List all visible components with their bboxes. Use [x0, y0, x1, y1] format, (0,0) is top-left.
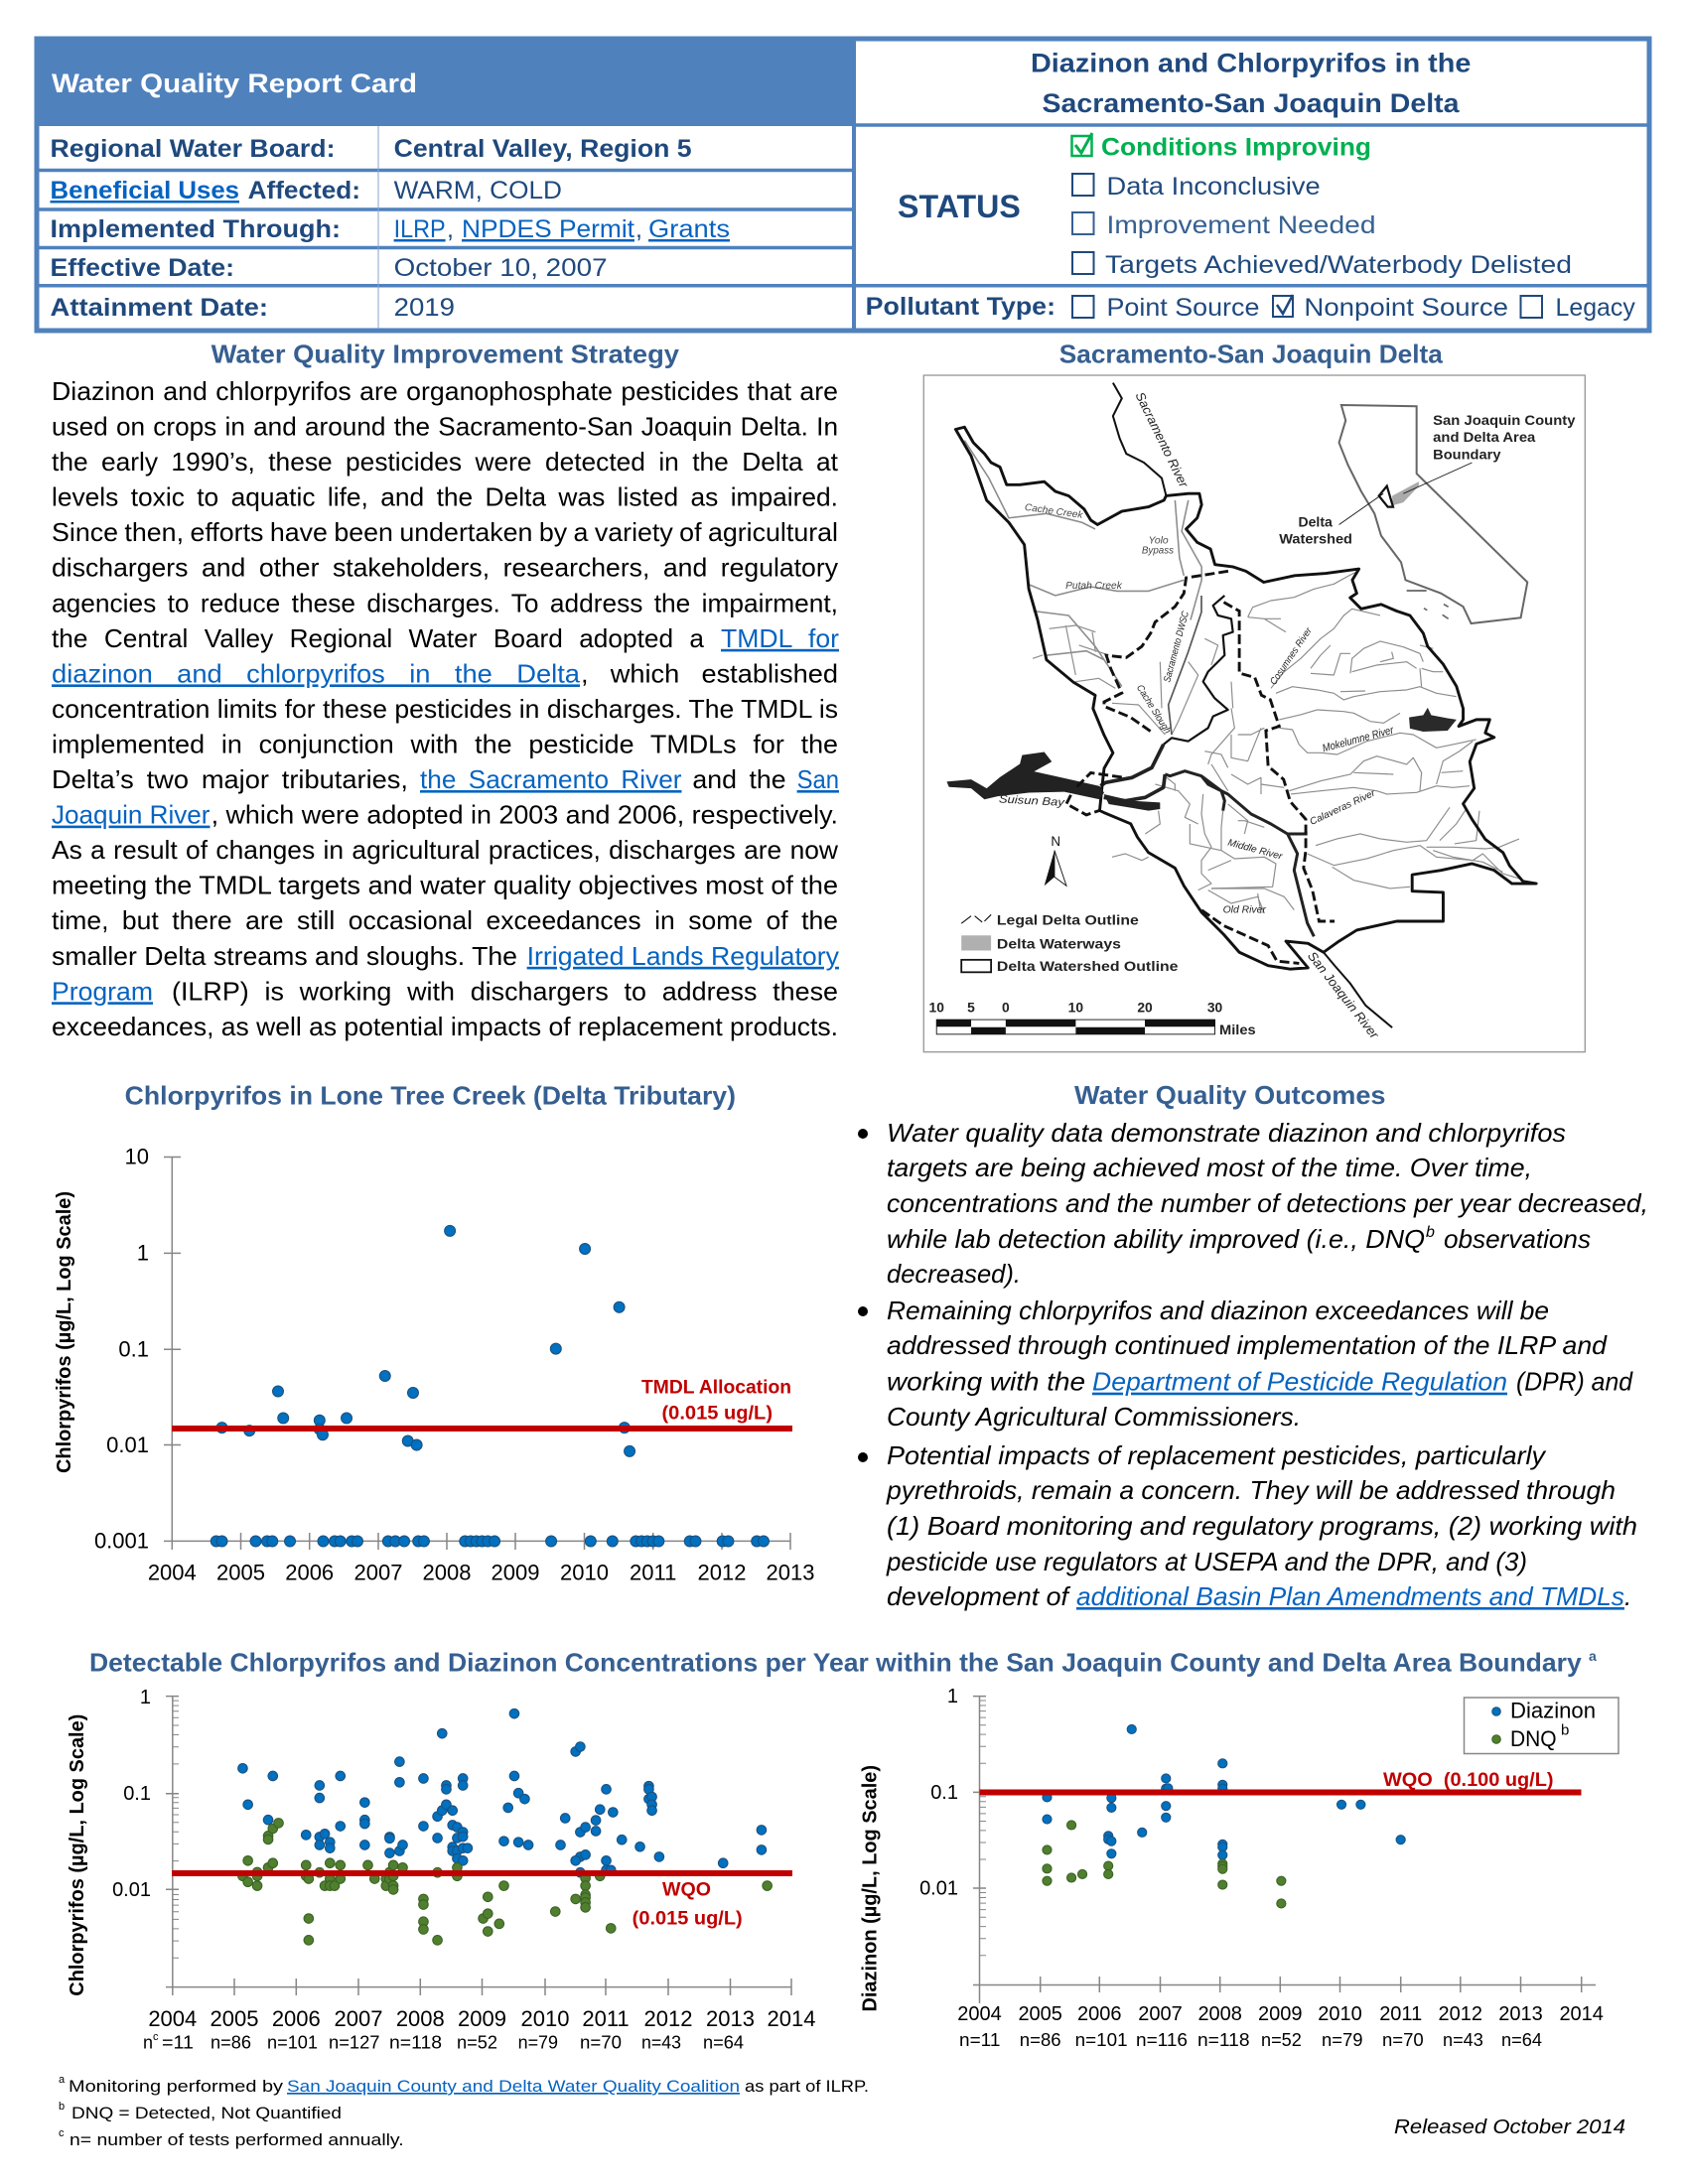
text block: strategy paragraph: concentration limits for these pesticides in discharges. The TMDL is	[52, 694, 838, 724]
map scale bar: Miles	[1219, 1022, 1256, 1037]
y axis labels: 0.1	[118, 1336, 149, 1362]
sample counts: n=11	[959, 2030, 1000, 2050]
map: river labels: Sacramento River	[1133, 389, 1192, 490]
x axis labels: 2013	[1498, 2003, 1543, 2025]
text block: strategy paragraph: Program	[52, 976, 153, 1006]
y axis labels	[94, 1144, 149, 1553]
bullet 3: additional Basin Plan Amendments and TMDLs	[1076, 1581, 1624, 1611]
table: program details: 2019	[394, 294, 455, 322]
text block: strategy paragraph: San	[797, 764, 839, 794]
sample counts: n=86	[1020, 2030, 1061, 2050]
map legend: Delta Watershed Outline	[997, 958, 1179, 974]
legend: Diazinon	[1510, 1699, 1596, 1723]
chart: Chlorpyrifos in Lone Tree Creek	[54, 1144, 814, 1585]
sample counts: n=79	[1322, 2030, 1362, 2050]
text block: outcomes bullets	[858, 1118, 1648, 1611]
map: California inset: Boundary	[1433, 446, 1501, 462]
x axis labels: 2010	[521, 2006, 569, 2031]
footnotes	[59, 2074, 869, 2149]
text block: strategy paragraph: meeting the TMDL targets and water quality objectives most of the	[52, 871, 838, 900]
WQO threshold line	[979, 1789, 1581, 1795]
y axis labels: 1	[140, 1687, 151, 1708]
table: program details: October 10, 2007	[394, 254, 608, 282]
text block: strategy paragraph: Irrigated Lands Regulatory	[527, 941, 839, 971]
bullet 3	[858, 1440, 1637, 1611]
map scale bar: 10	[1068, 1000, 1083, 1016]
map: Suisun Bay	[946, 751, 1104, 799]
status label: STATUS	[898, 189, 1021, 224]
x axis labels: 2006	[285, 1561, 334, 1585]
x axis labels: 2009	[458, 2006, 506, 2031]
map: river labels: Putah Creek	[1065, 581, 1123, 592]
y axis labels: 1	[947, 1686, 958, 1707]
x axis labels	[148, 1561, 814, 1585]
table: program details	[50, 135, 730, 322]
x axis labels: 2004	[957, 2003, 1002, 2025]
map: river labels: Bypass	[1142, 545, 1174, 556]
map: Legal Delta outline	[1066, 571, 1335, 963]
x axis labels: 2005	[216, 1561, 265, 1585]
WQO label: WQO	[662, 1880, 711, 1901]
y axis title: Chlorpyrifos (µg/L, Log Scale)	[54, 1191, 75, 1473]
release date: Released October 2014	[1394, 2116, 1625, 2138]
TMDL threshold line	[172, 1426, 792, 1432]
WQO label	[633, 1880, 743, 1929]
heading: report title	[1031, 48, 1471, 118]
x axis labels: 2008	[396, 2006, 445, 2031]
pollutant type row: Nonpoint Source	[1304, 294, 1508, 322]
y axis labels: 0.1	[930, 1782, 958, 1804]
map legend: Legal Delta Outline	[997, 912, 1139, 928]
map scale bar: 5	[967, 1000, 975, 1016]
sample counts: n=52	[1261, 2030, 1302, 2050]
bullet 1: observations	[1444, 1224, 1591, 1254]
bullet 1: while lab detection ability improved (i.e., DNQ	[887, 1224, 1425, 1254]
map: California inset: Watershed	[1279, 531, 1352, 547]
TMDL label: (0.015 ug/L)	[661, 1404, 773, 1425]
table: program details: Attainment Date:	[50, 294, 268, 322]
bullet 2: (DPR) and	[1516, 1367, 1633, 1397]
sample counts: n=70	[580, 2032, 622, 2052]
x axis labels: 2009	[1258, 2003, 1303, 2025]
icon: north arrow: N	[1051, 834, 1060, 849]
table: program details: Central Valley, Region 5	[394, 135, 692, 163]
y axis title: Chlorpyrifos (µg/L, Log Scale)	[67, 1714, 88, 1996]
sample counts: n=101	[1075, 2030, 1128, 2050]
text block: strategy paragraph	[52, 376, 839, 1041]
sample counts: n	[143, 2032, 153, 2052]
x axis labels	[957, 2003, 1604, 2025]
x axis labels: 2011	[630, 1561, 676, 1585]
panel: Delta map	[923, 375, 1585, 1052]
footnotes: c	[59, 2127, 65, 2139]
bullet 1	[858, 1118, 1648, 1289]
x axis labels	[148, 2006, 815, 2031]
bullet 3: pesticide use regulators at USEPA and the DPR, and (3)	[886, 1547, 1527, 1576]
table: program details: Grants	[648, 215, 730, 243]
sample counts	[959, 2030, 1542, 2050]
y axis labels	[112, 1687, 151, 1901]
text block: strategy paragraph: levels toxic to aquatic life, and the Delta was listed as impaired.	[52, 482, 838, 512]
map: California inset	[1279, 405, 1576, 623]
status checklist	[1072, 133, 1572, 279]
sample counts: c	[153, 2031, 159, 2043]
x axis labels: 2011	[1379, 2003, 1422, 2025]
text block: strategy paragraph: , which established	[581, 658, 838, 688]
map: western gray waterways	[964, 441, 1201, 686]
x axis labels: 2004	[148, 1561, 197, 1585]
x axis labels: 2009	[492, 1561, 539, 1585]
text block: strategy paragraph: Delta’s two major tributaries,	[52, 764, 408, 794]
map scale bar: 0	[1002, 1000, 1010, 1016]
icon: north arrow	[1045, 834, 1066, 886]
WQO label: (0.015 ug/L)	[633, 1908, 743, 1929]
text block: strategy paragraph: implemented in conjunction with the pesticide TMDLs for the	[52, 729, 838, 758]
sample counts: n=101	[267, 2032, 318, 2052]
text block: strategy paragraph: diazinon and chlorpyrifos in the Delta	[52, 658, 581, 688]
sample counts	[143, 2031, 744, 2052]
legend: DNQ	[1510, 1726, 1557, 1751]
heading: concentrations per year: a	[1589, 1648, 1597, 1664]
bullet 2: working with the	[887, 1367, 1085, 1397]
map: river labels	[999, 389, 1396, 1042]
map: river labels: Sacramento DWSC	[1162, 610, 1192, 684]
pollutant type row: Pollutant Type:	[866, 293, 1055, 321]
map: river labels: Middle River	[1226, 837, 1284, 863]
text block: strategy paragraph: dischargers and other stakeholders, researchers, and regulatory	[52, 553, 838, 583]
sample counts: n=70	[1382, 2030, 1424, 2050]
data points	[211, 1225, 769, 1547]
bullet 1: b	[1426, 1224, 1435, 1241]
map: river labels: Cache Slough	[1134, 683, 1173, 736]
bullet 1: Water quality data demonstrate diazinon and chlorpyrifos	[887, 1118, 1566, 1148]
map: main rivers	[1113, 383, 1392, 1027]
text block: strategy paragraph: Since then, efforts have been undertaken by a variety of agricultural	[52, 517, 838, 547]
heading: Lone Tree Creek chart title: Chlorpyrifos in Lone Tree Creek (Delta Tributary)	[125, 1081, 736, 1111]
sample counts: n=86	[211, 2032, 251, 2052]
text block: strategy paragraph: the Central Valley Regional Water Board adopted a	[52, 623, 705, 653]
text block: strategy paragraph: the early 1990’s, these pesticides were detected in the Delta at	[52, 447, 839, 477]
x axis labels: 2007	[1138, 2003, 1183, 2025]
text block: strategy paragraph: , which were adopted in 2003 and 2006, respectively.	[211, 800, 838, 830]
table: program details: Regional Water Board:	[50, 135, 336, 163]
data points: chlorpyrifos	[238, 1708, 772, 1945]
y axis labels: 0.01	[106, 1433, 149, 1457]
table: program details: ,	[447, 215, 454, 243]
bullet 2: Department of Pesticide Regulation	[1092, 1367, 1507, 1397]
panel: report card header table	[35, 37, 1649, 331]
footnotes: DNQ = Detected, Not Quantified	[71, 2104, 342, 2122]
map: river labels: Cache Creek	[1024, 502, 1084, 521]
text block: strategy paragraph: smaller Delta streams and sloughs. The	[52, 941, 517, 971]
sample counts: n=118	[1197, 2030, 1249, 2050]
footnotes: San Joaquin County and Delta Water Quality Coalition	[287, 2077, 740, 2096]
map scale bar	[929, 1000, 1256, 1037]
table: program details: Affected:	[248, 177, 360, 205]
x axis labels: 2012	[644, 2006, 692, 2031]
map scale bar: 10	[929, 1000, 944, 1016]
pollutant type row: Legacy	[1555, 294, 1635, 322]
table: program details: ILRP	[394, 215, 446, 243]
map: river labels: Calaveras River	[1308, 787, 1378, 828]
map: river labels: San Joaquin River	[1305, 948, 1382, 1042]
y axis labels: 1	[137, 1241, 149, 1265]
y axis title: Diazinon (µg/L, Log Scale)	[859, 1765, 881, 2011]
heading: concentrations per year: Detectable Chlorpyrifos and Diazinon Concentrations per Year within the San Joaquin County and Delta Area Boundary	[89, 1647, 1582, 1677]
sample counts: n=64	[1501, 2030, 1542, 2050]
legend: b	[1561, 1721, 1569, 1739]
pollutant type row	[866, 293, 1635, 322]
map legend	[961, 912, 1179, 974]
x axis labels: 2010	[1318, 2003, 1362, 2025]
heading: report title: Sacramento-San Joaquin Delta	[1043, 88, 1461, 118]
map: river labels: Cosumnes River	[1268, 625, 1315, 687]
map: dark channels	[1164, 596, 1233, 745]
sample counts: n=116	[1136, 2030, 1188, 2050]
footnotes: n= number of tests performed annually.	[70, 2130, 404, 2149]
inset coastline and islands	[1407, 591, 1449, 618]
status checklist: Data Inconclusive	[1106, 173, 1321, 201]
map legend: Delta Waterways	[997, 936, 1121, 952]
x axis labels: 2007	[335, 2006, 382, 2031]
TMDL label: TMDL Allocation	[641, 1378, 791, 1399]
map: Delta watershed outline	[955, 427, 1536, 969]
map scale bar: 20	[1137, 1000, 1153, 1016]
text block: strategy paragraph: exceedances, as well as potential impacts of replacement products.	[52, 1012, 838, 1041]
bullet 1: targets are being achieved most of the time. Over time,	[887, 1153, 1532, 1182]
sample counts: n=43	[1443, 2030, 1483, 2050]
map: river labels: Old River	[1223, 905, 1267, 916]
text block: strategy paragraph: and the	[692, 764, 786, 794]
text block: strategy paragraph: the Sacramento River	[420, 764, 682, 794]
map: eastern tributaries	[1248, 571, 1519, 888]
text block: strategy paragraph: Joaquin River	[52, 800, 211, 830]
sample counts: n=43	[641, 2032, 681, 2052]
x axis labels: 2006	[1077, 2003, 1122, 2025]
heading: Water Quality Outcomes: Water Quality Outcomes	[1074, 1080, 1386, 1110]
table: program details: WARM, COLD	[394, 177, 562, 205]
x axis labels: 2013	[767, 1561, 814, 1585]
map: California inset: San Joaquin County	[1433, 412, 1576, 428]
text block: strategy paragraph: (ILRP) is working with dischargers to address these	[172, 976, 838, 1006]
y axis labels	[919, 1686, 958, 1900]
x axis labels: 2008	[1197, 2003, 1242, 2025]
map: river labels: Yolo	[1149, 536, 1169, 547]
table: program details: ,	[635, 215, 642, 243]
y axis labels: 10	[125, 1144, 149, 1169]
text block: strategy paragraph: Diazinon and chlorpyrifos are organophosphate pesticides that are	[52, 376, 838, 406]
map: central delta waterways	[1033, 596, 1314, 936]
footnotes: Monitoring performed by	[69, 2077, 284, 2096]
x axis labels: 2005	[211, 2006, 258, 2031]
sample counts: n=52	[457, 2032, 497, 2052]
status checklist: Targets Achieved/Waterbody Delisted	[1105, 251, 1572, 279]
status checklist: Improvement Needed	[1106, 211, 1376, 239]
map: California inset: and Delta Area	[1433, 429, 1536, 445]
x axis labels: 2012	[1439, 2003, 1482, 2025]
table: program details: Effective Date:	[50, 254, 234, 282]
text block: strategy paragraph: agencies to reduce these discharges. To address the impairment,	[52, 588, 838, 617]
x axis labels: 2012	[698, 1561, 746, 1585]
footnotes: as part of ILRP.	[745, 2077, 869, 2096]
x axis labels: 2004	[148, 2006, 197, 2031]
WQO threshold line	[172, 1870, 792, 1876]
bullet 2: County Agricultural Commissioners.	[887, 1402, 1301, 1432]
y axis labels: 0.1	[123, 1783, 151, 1805]
footnotes: b	[59, 2101, 65, 2113]
status checklist: Conditions Improving	[1101, 134, 1371, 162]
bullet 2: Remaining chlorpyrifos and diazinon exceedances will be	[887, 1296, 1549, 1325]
pollutant type row: Point Source	[1106, 294, 1259, 322]
heading: Water Quality Report Card: Water Quality Report Card	[52, 68, 417, 98]
map: river labels: Suisun Bay	[999, 793, 1066, 809]
map: river labels: Mokelumne River	[1322, 724, 1396, 754]
TMDL label	[641, 1378, 791, 1425]
text block: strategy paragraph: As a result of changes in agricultural practices, discharges are now	[52, 835, 838, 865]
map scale bar: 30	[1207, 1000, 1223, 1016]
bullet 1: concentrations and the number of detections per year decreased,	[887, 1188, 1648, 1218]
table: program details: Implemented Through:	[50, 215, 341, 243]
chart: Diazinon concentrations per year	[859, 1686, 1618, 2050]
y axis labels: 0.001	[94, 1529, 149, 1553]
WQO label: WQO (0.100 ug/L)	[1383, 1770, 1553, 1791]
y axis labels: 0.01	[112, 1879, 151, 1901]
heading: report title: Diazinon and Chlorpyrifos in the	[1031, 48, 1471, 77]
bullet 3: .	[1624, 1581, 1631, 1611]
x axis labels: 2005	[1018, 2003, 1062, 2025]
sample counts: n=118	[389, 2032, 442, 2052]
sample counts: =11	[162, 2032, 194, 2052]
bullet 3: pyrethroids, remain a concern. They will be addressed through	[886, 1475, 1616, 1505]
map: reservoir	[1409, 708, 1457, 732]
bullet 3: Potential impacts of replacement pesticides, particularly	[887, 1440, 1547, 1470]
sample counts: n=127	[329, 2032, 379, 2052]
sample counts: n=79	[518, 2032, 558, 2052]
x axis labels: 2013	[706, 2006, 755, 2031]
data points: diazinon	[1043, 1724, 1405, 1908]
legend	[1464, 1698, 1618, 1753]
x axis labels: 2008	[423, 1561, 471, 1585]
heading: Sacramento-San Joaquin Delta map: Sacramento-San Joaquin Delta	[1059, 340, 1443, 369]
footnotes: a	[59, 2074, 66, 2086]
map: California inset: Delta	[1298, 514, 1333, 530]
chart: Chlorpyrifos concentrations per year	[67, 1687, 815, 2052]
x axis labels: 2011	[582, 2006, 630, 2031]
x axis labels: 2014	[768, 2006, 815, 2031]
x axis labels: 2010	[560, 1561, 609, 1585]
text block: strategy paragraph: used on crops in and around the Sacramento-San Joaquin Delta. In	[52, 411, 838, 441]
table: program details: NPDES Permit	[462, 215, 634, 243]
x axis labels: 2007	[354, 1561, 402, 1585]
bullet 1: decreased).	[887, 1259, 1021, 1289]
x axis labels: 2014	[1559, 2003, 1604, 2025]
text block: strategy paragraph: time, but there are still occasional exceedances in some of the	[52, 905, 838, 935]
y axis labels: 0.01	[919, 1878, 958, 1900]
heading: Water Quality Improvement Strategy: Water Quality Improvement Strategy	[211, 340, 680, 369]
table: program details: Beneficial Uses	[50, 177, 239, 205]
sample counts: n=64	[703, 2032, 744, 2052]
bullet 2	[858, 1296, 1633, 1432]
bullet 2: addressed through continued implementation of the ILRP and	[887, 1330, 1609, 1360]
bullet 3: development of	[887, 1581, 1071, 1611]
bullet 3: (1) Board monitoring and regulatory programs, (2) working with	[887, 1511, 1637, 1541]
x axis labels: 2006	[272, 2006, 321, 2031]
text block: strategy paragraph: TMDL for	[721, 623, 839, 653]
